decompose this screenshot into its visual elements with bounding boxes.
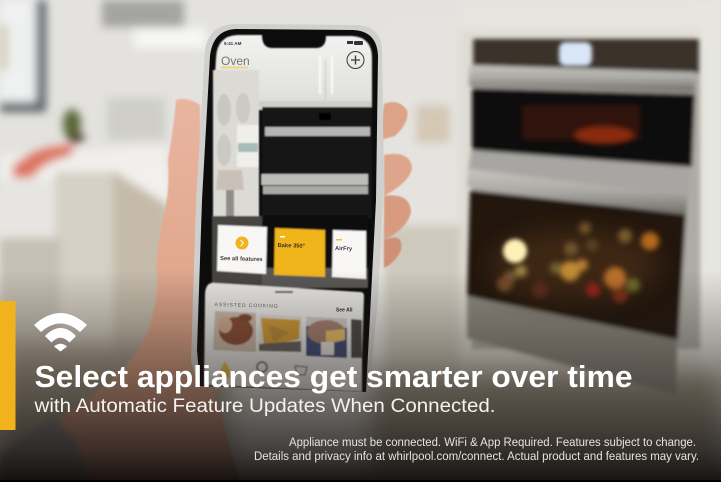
card: airfry (335, 239, 353, 252)
phone status bar: 9:41 AM (224, 41, 242, 46)
subheading: with Automatic Feature Updates When Connected. (33, 396, 495, 417)
card: see all features (220, 236, 263, 263)
icon: wifi (34, 313, 87, 352)
assisted cooking label: See All (336, 308, 353, 314)
phone screen (204, 35, 372, 392)
assisted cooking sheet (204, 283, 364, 392)
phone body (191, 24, 384, 392)
plus button (347, 52, 364, 68)
lamp (216, 170, 244, 190)
card: bake 350 (277, 236, 306, 250)
card: airfry: AirFry (335, 246, 353, 252)
assisted cooking label (214, 302, 353, 314)
wallpaper panel (213, 70, 259, 220)
phone heading: Oven: Oven (221, 54, 250, 68)
bottom black edge (0, 480, 721, 482)
phone status bar (224, 41, 363, 46)
dark bottom gradient overlay (0, 270, 721, 482)
floor (0, 345, 230, 482)
card: see all features: See all features (220, 256, 263, 263)
smartphone (191, 24, 384, 392)
card: bake 350: Bake 350° (277, 243, 306, 250)
hand holding phone (0, 99, 412, 482)
yellow accent bar (0, 301, 16, 430)
feature cards (217, 225, 267, 274)
disclaimer text (254, 435, 699, 463)
disclaimer text: Details and privacy info at whirlpool.com/connect. Actual product and features may vary. (254, 449, 699, 463)
nav icons (220, 361, 230, 378)
disclaimer text: Appliance must be connected. WiFi & App Required. Features subject to change. (289, 435, 696, 449)
sleeve (0, 415, 90, 482)
food thumbnails (213, 311, 256, 352)
oven (467, 39, 700, 395)
oven display (559, 42, 592, 66)
assisted cooking label: ASSISTED COOKING (214, 302, 279, 310)
wall oven in phone (262, 107, 372, 219)
headline: Select appliances get smarter over time (34, 360, 632, 394)
